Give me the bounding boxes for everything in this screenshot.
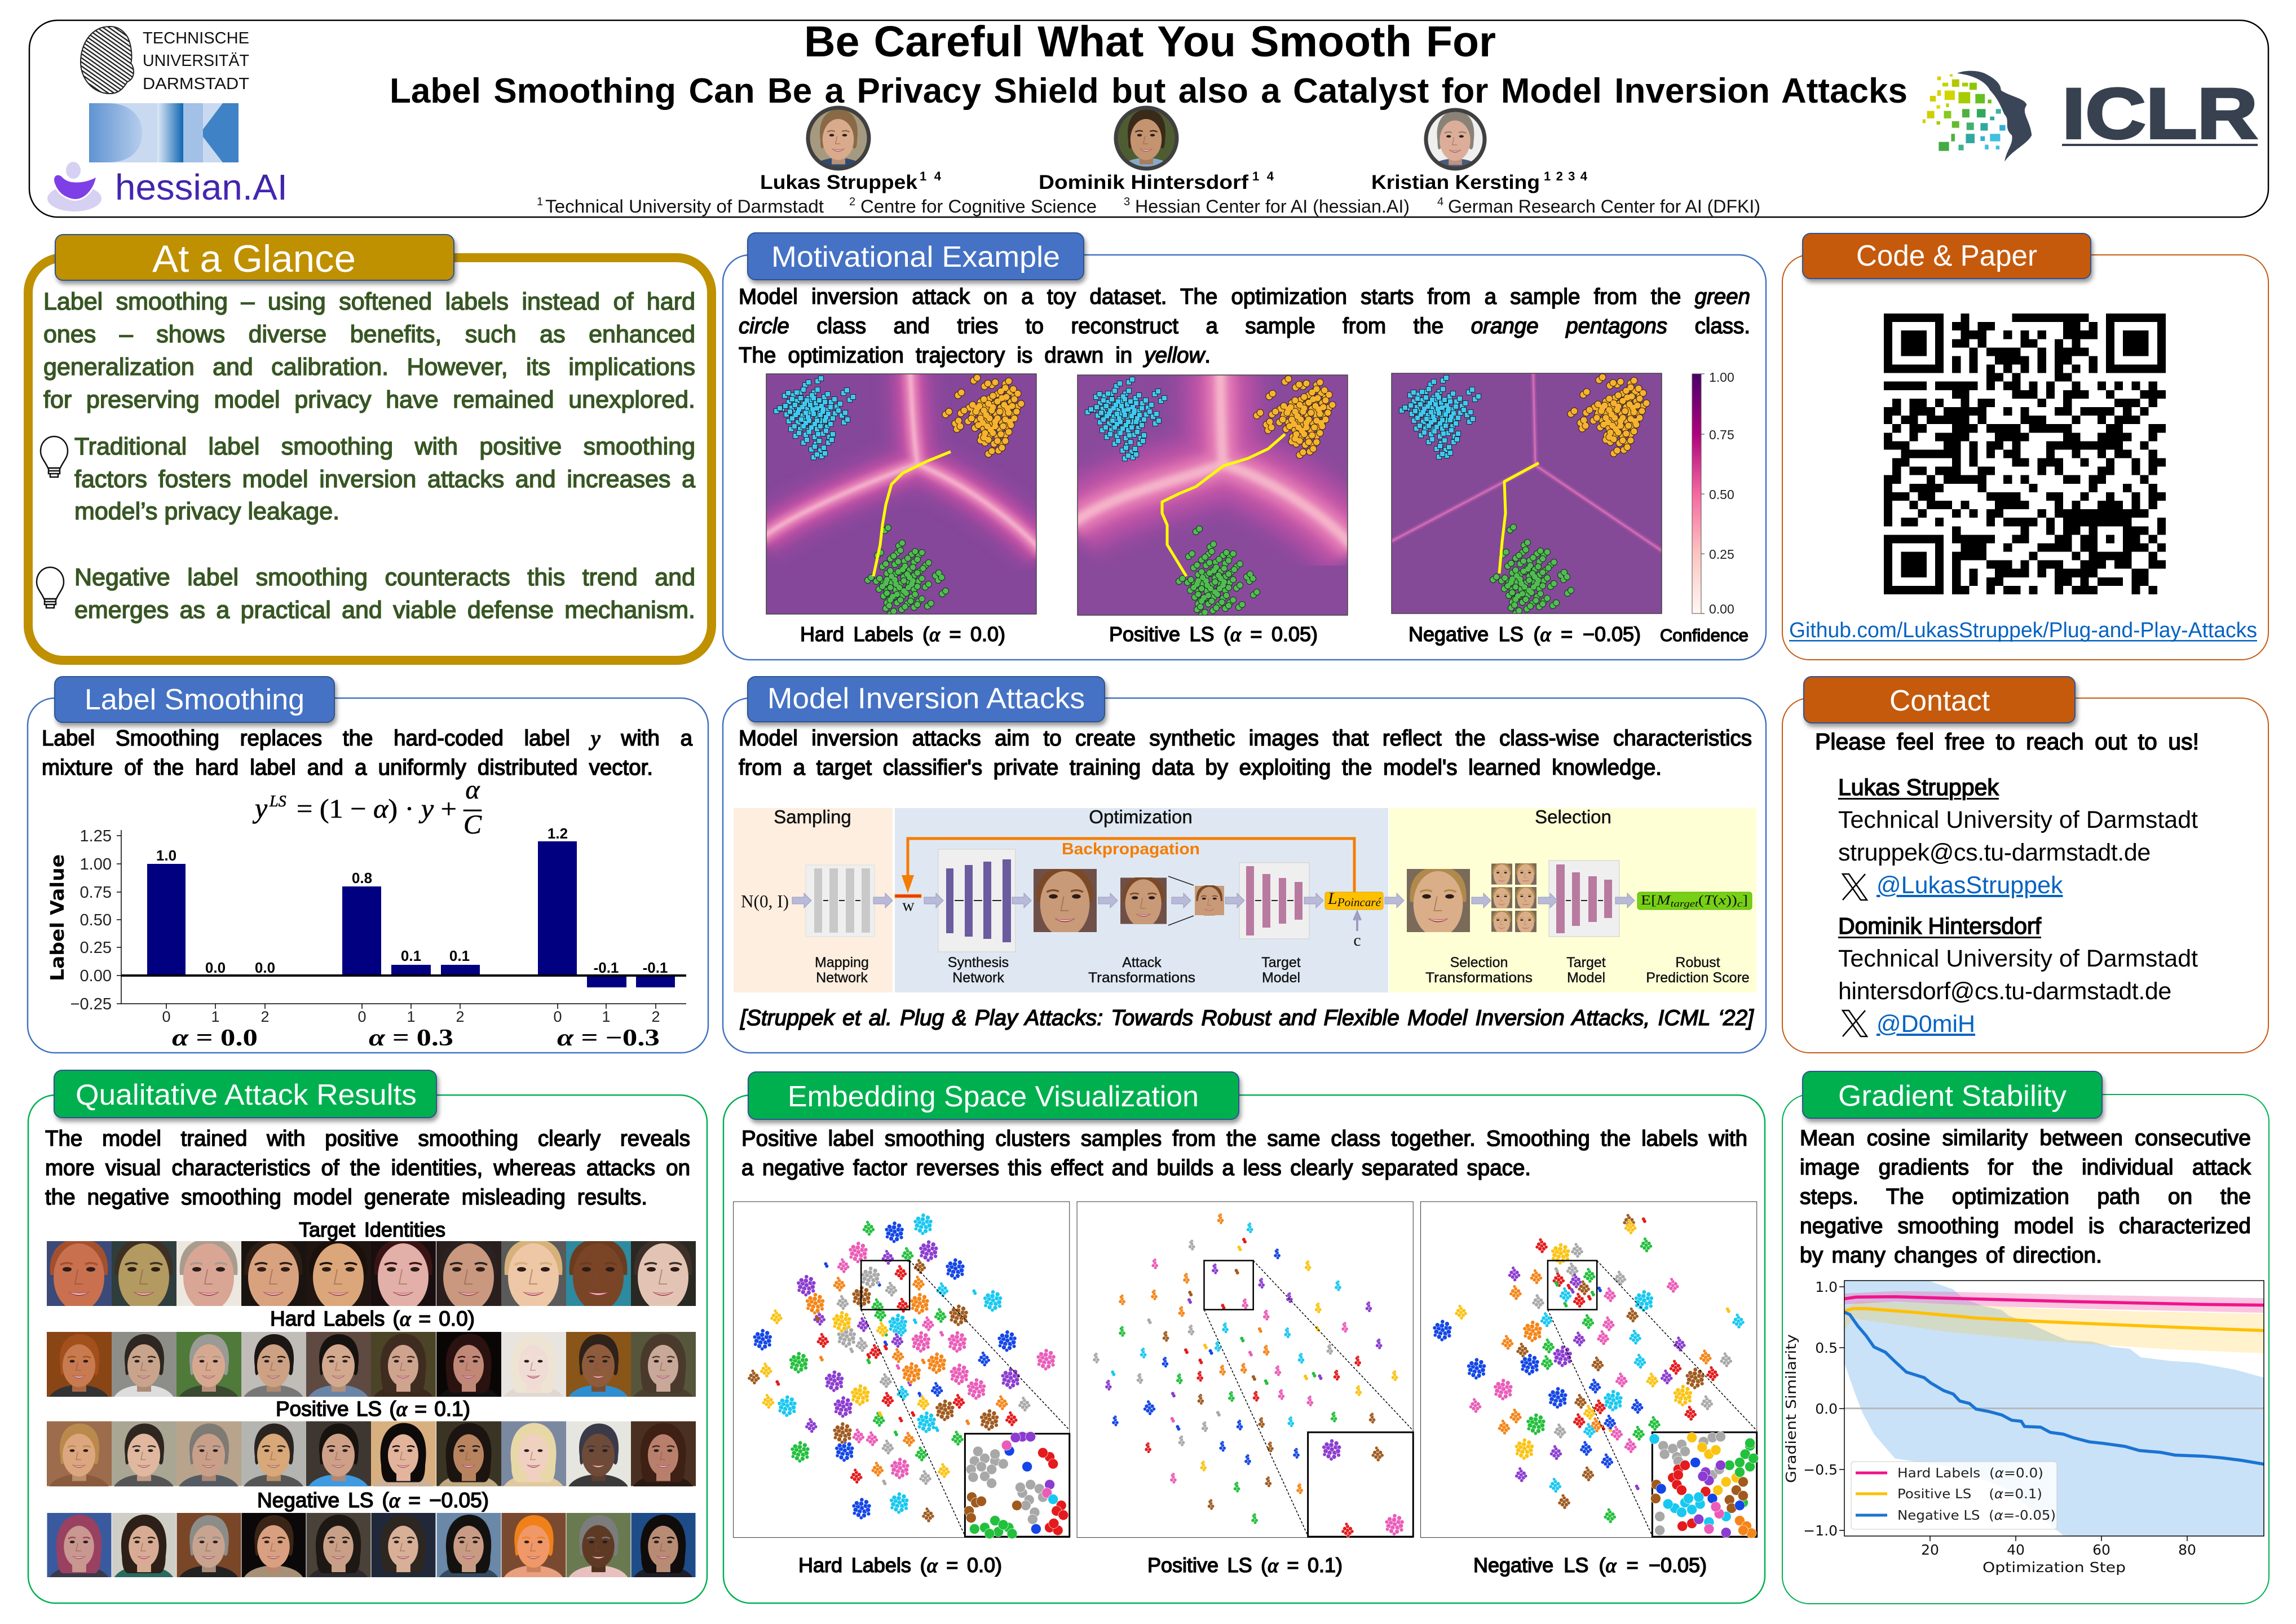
labels: math: E[M	[1641, 893, 1668, 908]
text block: qualitative description: the negative smoothing model generate misleading results.	[45, 1185, 647, 1210]
line chart: gradient similarity: 60	[2092, 1542, 2110, 1558]
text block: label smoothing intro	[43, 288, 695, 413]
text: Lukas Struppek contact	[1838, 771, 2207, 902]
labels: math	[741, 889, 1752, 950]
logo: TU Darmstadt: UNIVERSITÄT	[143, 52, 249, 70]
line chart: gradient similarity: 0.0	[1815, 1401, 1838, 1417]
labels: math: T(x))	[1704, 893, 1735, 908]
panel: Label Smoothing	[28, 676, 708, 1053]
author names	[760, 169, 1588, 193]
author names: Kristian Kersting	[1371, 171, 1540, 193]
line chart: gradient similarity: 1.0	[1815, 1279, 1838, 1295]
labels: pipeline stages: Robust	[1675, 955, 1720, 970]
bar chart: label values: 0.1	[449, 947, 470, 964]
caption: negative LS: Negative LS (α = −0.05)	[257, 1489, 489, 1512]
scatter plot: positive LS	[1077, 1202, 1413, 1538]
colorbar: confidence: 0.50	[1709, 487, 1734, 502]
labels: pipeline stages: Synthesis	[948, 955, 1009, 970]
bar chart: label values: 0.00	[80, 967, 112, 985]
formula: α	[465, 775, 480, 805]
heading: Contact: Contact	[1889, 685, 1990, 717]
scatter plot: negative LS	[1421, 1202, 1759, 1538]
text block: model inversion description: Model inversion attacks aim to create synthetic images that reflect the class-wise characteristics	[739, 726, 1752, 751]
bar chart: label values: α = 0.0	[172, 1025, 258, 1051]
panel: Qualitative Attack Results	[28, 1070, 707, 1603]
caption: hard labels plot: Hard Labels (α = 0.0)	[800, 623, 1005, 646]
heading: Motivational Example	[748, 233, 1084, 280]
logo: ICLR brain	[1923, 71, 2032, 162]
labels: math: c	[1353, 931, 1361, 950]
formula: = (1 − α) · y +	[297, 794, 457, 824]
heading: At a Glance	[55, 235, 454, 280]
heading: Code & Paper: Code & Paper	[1856, 240, 2037, 272]
legend	[1851, 1462, 2057, 1529]
text block: label smoothing intro: Label smoothing – using softened labels instead of hard	[43, 288, 695, 315]
heading: Gradient Stability: Gradient Stability	[1838, 1080, 2067, 1113]
bar chart: label values: -0.1	[594, 959, 619, 976]
backpropagation arrow	[902, 839, 1354, 893]
target model selection	[1549, 860, 1619, 937]
section: sampling: Sampling	[774, 806, 851, 827]
text block: finding 2: emerges as a practical and viable defense mechanism.	[74, 597, 695, 624]
bar chart: label values: 1.00	[80, 855, 112, 873]
text block: qualitative description	[45, 1124, 690, 1212]
panel: Embedding Space Visualization	[723, 1072, 1765, 1603]
face row: hard labels	[47, 1332, 696, 1419]
labels: pipeline stages: Network	[952, 970, 1004, 986]
bar chart: label values: 0.0	[205, 959, 226, 976]
bar chart: label values: 0.8	[352, 870, 372, 886]
panel: Gradient Stability	[1782, 1071, 2269, 1604]
bar chart: label values: −0.25	[70, 995, 112, 1013]
face images	[1034, 863, 1536, 937]
line chart: gradient similarity	[1783, 1279, 2264, 1576]
avatar: Dominik Hintersdorf	[1115, 107, 1177, 190]
panel: Motivational Example	[723, 233, 1766, 660]
labels: math: ]	[1742, 893, 1748, 908]
bar chart: label values: 0	[553, 1008, 562, 1025]
bar chart: label values: Label Value	[46, 854, 68, 981]
labels: pipeline stages: Transformations	[1425, 970, 1533, 986]
panel: At a Glance	[24, 234, 716, 665]
heading: Gradient Stability	[1803, 1071, 2102, 1118]
bar chart: label values	[46, 825, 686, 1051]
text block: finding 1: Traditional label smoothing with positive smoothing	[74, 433, 695, 460]
logo: DFKI	[89, 103, 239, 162]
heading: Qualitative Attack Results	[54, 1070, 436, 1118]
line chart: gradient similarity: 0.5	[1815, 1340, 1838, 1356]
heading: Contact	[1804, 677, 2075, 723]
text block: finding 1: model’s privacy leakage.	[74, 498, 339, 525]
logo: TU Darmstadt: DARMSTADT	[143, 75, 249, 93]
affiliations: Hessian Center for AI (hessian.AI)	[1135, 196, 1410, 217]
text block: motivational description: The optimization trajectory is drawn in yellow.	[739, 343, 1211, 368]
text: Dominik Hintersdorf contact: Dominik Hintersdorf	[1838, 913, 2041, 939]
text block: gradient description: negative smoothing model is characterized	[1800, 1214, 2251, 1238]
affiliations: 3	[1124, 196, 1130, 208]
text block: embedding description: Positive label smoothing clusters samples from the same class together. Smoothing the labels with	[741, 1127, 1747, 1151]
text: Lukas Struppek contact: Technical University of Darmstadt	[1838, 806, 2198, 833]
text block: finding 2: Negative label smoothing counteracts this trend and	[74, 564, 695, 591]
labels: pipeline stages: Selection	[1450, 955, 1508, 970]
panel: Contact	[1782, 677, 2269, 1053]
bar chart: label values: 0	[357, 1008, 367, 1025]
formula: C	[463, 810, 482, 840]
author names: 1 4	[1252, 169, 1274, 183]
text block: label smoothing intro: ones – shows diverse benefits, such as enhanced	[43, 321, 695, 348]
legend: Positive LS ( α=0.1)	[1897, 1487, 2042, 1502]
heading: Code & Paper	[1803, 233, 2091, 279]
colorbar: confidence	[1692, 370, 1734, 616]
synthesis network	[938, 849, 1015, 952]
labels: pipeline stages: Model	[1262, 970, 1300, 986]
text block: gradient description	[1800, 1124, 2251, 1270]
labels: pipeline stages: Network	[816, 970, 868, 986]
labels: math: w	[902, 896, 915, 915]
text: Lukas Struppek contact: struppek@cs.tu-darmstadt.de	[1838, 839, 2151, 866]
avatar: Lukas Struppek	[807, 107, 869, 190]
text: Dominik Hintersdorf contact: Technical University of Darmstadt	[1838, 945, 2198, 972]
line chart: gradient similarity: Optimization Step	[1982, 1559, 2126, 1576]
bar chart: label values: 0.75	[80, 884, 112, 902]
line chart: gradient similarity: Gradient Similarity	[1783, 1334, 1799, 1483]
text block: motivational description	[739, 283, 1750, 370]
bar chart: label values: 0.50	[80, 911, 112, 929]
heading: Motivational Example: Motivational Example	[771, 241, 1060, 273]
logo: TU Darmstadt: TECHNISCHE	[143, 29, 249, 47]
bar chart: label values: 1	[211, 1008, 220, 1025]
line chart: gradient similarity: 20	[1921, 1542, 1939, 1558]
labels: math: L	[1327, 889, 1337, 908]
text block: motivational description: circle class and tries to reconstruct a sample from the orange pentagons class.	[739, 314, 1750, 338]
affiliations: Technical University of Darmstadt	[545, 196, 824, 217]
caption: negative LS embedding: Negative LS (α = −0.05)	[1473, 1554, 1707, 1577]
labels: pipeline stages: Model	[1567, 970, 1605, 986]
icon: light bulb	[41, 436, 68, 477]
colorbar: confidence: 0.00	[1709, 602, 1734, 616]
bar chart: label values: 2	[456, 1008, 465, 1025]
text block: model inversion description: from a target classifier's private training data by exploiting the model's learned knowledge.	[739, 756, 1662, 780]
line chart: gradient similarity: −1.0	[1803, 1522, 1838, 1539]
labels: pipeline stages: Attack	[1122, 955, 1162, 970]
section: selection: Selection	[1535, 806, 1611, 827]
bar chart: label values: 2	[260, 1008, 270, 1025]
plot: positive LS decision surface	[1072, 369, 1354, 615]
bar chart: label values: 1	[407, 1008, 416, 1025]
text: Lukas Struppek contact: Lukas Struppek	[1838, 774, 1999, 800]
caption: positive LS plot: Positive LS (α = 0.05)	[1109, 623, 1318, 646]
labels: math: N(0, I)	[741, 891, 789, 911]
text block: motivational description: Model inversion attack on a toy dataset. The optimization starts from a sample from the green	[739, 285, 1750, 309]
text block: embedding description: a negative factor reverses this effect and builds a less clearly separated space.	[741, 1156, 1531, 1180]
author names: 1 2 3 4	[1544, 169, 1588, 183]
author names: 1 4	[920, 169, 942, 183]
flow arrows	[792, 893, 1635, 931]
formula	[252, 775, 482, 840]
text block: gradient description: Mean cosine similarity between consecutive	[1800, 1126, 2251, 1150]
section: sampling	[734, 806, 893, 992]
labels: math: (	[1698, 893, 1704, 908]
bar chart: label values: 1.2	[547, 825, 568, 842]
caption: positive LS embedding: Positive LS (α = 0.1)	[1147, 1554, 1343, 1577]
icon: X logo	[1843, 874, 1867, 900]
text: Dominik Hintersdorf contact	[1838, 910, 2207, 1040]
title: Be Careful What You Smooth For	[804, 17, 1496, 66]
icon: light bulb	[37, 567, 64, 608]
text block: label smoothing intro: generalization and calibration. However, its implications	[43, 354, 695, 381]
text block: gradient description: steps. The optimization path on the	[1800, 1185, 2251, 1209]
labels: pipeline stages: Prediction Score	[1646, 970, 1750, 986]
line chart: gradient similarity: 80	[2178, 1542, 2196, 1558]
labels: pipeline stages: Target	[1566, 955, 1606, 970]
bar chart: label values: 0.0	[255, 959, 275, 976]
section: optimization: Optimization	[1089, 806, 1193, 827]
caption: confidence: Confidence	[1660, 625, 1749, 645]
labels: pipeline stages: Target	[1261, 955, 1301, 970]
mapping network	[806, 865, 875, 937]
heading: Model Inversion Attacks	[748, 677, 1105, 722]
colorbar: confidence: 1.00	[1709, 370, 1734, 385]
face row: target identities	[47, 1239, 696, 1311]
text block: gradient description: image gradients for the individual attack	[1800, 1155, 2251, 1180]
text: Dominik Hintersdorf contact: hintersdorf@cs.tu-darmstadt.de	[1838, 978, 2171, 1005]
heading: Embedding Space Visualization: Embedding Space Visualization	[788, 1080, 1199, 1113]
affiliations: Centre for Cognitive Science	[860, 196, 1097, 217]
legend: Negative LS ( α=-0.05)	[1897, 1508, 2056, 1523]
heading: Embedding Space Visualization	[748, 1072, 1239, 1119]
heading: Model Inversion Attacks: Model Inversion Attacks	[767, 682, 1085, 715]
bar chart: label values: α = −0.3	[557, 1025, 660, 1051]
text block: gradient description: by many changes of direction.	[1800, 1243, 2102, 1268]
labels: math: c	[1737, 898, 1743, 909]
logo: TU Darmstadt	[81, 27, 249, 94]
text block: finding 2	[74, 561, 695, 626]
text block: qualitative description: more visual characteristics of the identities, whereas attacks on	[45, 1156, 690, 1180]
subtitle: Label Smoothing Can Be a Privacy Shield but also a Catalyst for Model Inversion Attacks	[390, 72, 1908, 111]
colorbar: confidence: 0.75	[1709, 427, 1734, 442]
text block: label smoothing description: mixture of the hard label and a uniformly distributed vector.	[42, 756, 653, 780]
bar chart: label values: α = 0.3	[369, 1025, 453, 1051]
line chart: gradient similarity: −0.5	[1803, 1462, 1838, 1478]
heading: At a Glance: At a Glance	[152, 237, 356, 280]
caption: target identities: Target Identities	[299, 1218, 445, 1241]
colorbar: confidence: 0.25	[1709, 547, 1734, 562]
face row: negative LS	[47, 1513, 696, 1599]
affiliations	[537, 196, 1760, 217]
author names: Dominik Hintersdorf	[1039, 171, 1248, 193]
bar chart: label values: 1	[602, 1008, 611, 1025]
panel: header	[28, 17, 2269, 218]
bar chart: label values: 1.0	[156, 847, 176, 864]
legend: Hard Labels ( α=0.0)	[1897, 1466, 2043, 1481]
labels: math: target	[1671, 898, 1699, 909]
formula: LS	[269, 793, 286, 810]
link: GitHub repository: Github.com/LukasStruppek/Plug-and-Play-Attacks	[1789, 619, 2257, 642]
affiliations: 1	[537, 196, 543, 208]
labels: pipeline stages: Transformations	[1088, 970, 1195, 986]
text block: label smoothing description	[42, 724, 692, 783]
text block: finding 1: factors fosters model inversion attacks and increases a	[74, 466, 695, 493]
text block: qualitative description: The model trained with positive smoothing clearly reveals	[45, 1127, 690, 1151]
labels: pipeline stages	[815, 955, 1750, 986]
plot: hard labels decision surface	[761, 368, 1043, 614]
QR code	[1884, 314, 2166, 594]
citation: [Struppek et al. Plug & Play Attacks: Towards Robust and Flexible Model Inversion Attacks, ICML ‘22]	[740, 1006, 1754, 1030]
text block: label smoothing description: Label Smoothing replaces the hard-coded label y with a	[42, 726, 692, 751]
bar chart: label values: -0.1	[643, 959, 668, 976]
text: Dominik Hintersdorf contact: @D0miH	[1876, 1010, 1975, 1038]
heading: Label Smoothing	[55, 677, 334, 722]
plot: negative LS decision surface	[1386, 368, 1668, 614]
logo: hessian.AI: hessian.AI	[115, 167, 288, 208]
text block: label smoothing intro: for preserving model privacy have remained unexplored.	[43, 386, 695, 413]
logo: ICLR wordmark: ICLR	[2062, 73, 2258, 153]
formula: y	[252, 792, 268, 824]
panel: Code & Paper	[1782, 233, 2269, 660]
author names: Lukas Struppek	[760, 171, 918, 193]
affiliations: 2	[849, 196, 855, 208]
affiliations: 4	[1437, 196, 1443, 208]
scatter plot: hard labels	[734, 1202, 1070, 1539]
face row: positive LS	[47, 1421, 696, 1508]
labels: math: Poincaré	[1337, 895, 1382, 909]
section: selection	[1389, 806, 1756, 992]
diagram: plug and play attack pipeline	[734, 806, 1756, 992]
heading: Qualitative Attack Results: Qualitative Attack Results	[76, 1079, 417, 1111]
caption: hard labels embedding: Hard Labels (α = 0.0)	[798, 1554, 1002, 1577]
target model	[1239, 863, 1309, 939]
text block: finding 1	[74, 433, 696, 525]
section: optimization	[895, 806, 1388, 992]
bar chart: label values: 0.1	[401, 947, 421, 964]
panel: Model Inversion Attacks	[723, 676, 1766, 1053]
bar chart: label values: 1.25	[80, 827, 112, 845]
text: invitation: Please feel free to reach out to us!	[1815, 729, 2199, 754]
text: Lukas Struppek contact: @LukasStruppek	[1876, 872, 2063, 899]
caption: positive LS: Positive LS (α = 0.1)	[276, 1397, 470, 1421]
caption: negative LS plot: Negative LS (α = −0.05)	[1408, 623, 1641, 646]
affiliations: German Research Center for AI (DFKI)	[1448, 196, 1760, 217]
labels: pipeline stages: Mapping	[815, 955, 869, 970]
bar chart: label values: 0	[162, 1008, 171, 1025]
text block: model inversion description	[739, 724, 1752, 783]
bar chart: label values: 0.25	[80, 939, 112, 957]
avatar: Kristian Kersting	[1425, 109, 1486, 191]
text block: embedding description	[741, 1124, 1747, 1183]
backpropagation arrow: Backpropagation	[1062, 840, 1200, 858]
heading: Label Smoothing: Label Smoothing	[85, 683, 304, 716]
logo: hessian.AI	[47, 162, 288, 211]
icon: X logo	[1843, 1010, 1867, 1036]
bar chart: label values: 2	[651, 1008, 660, 1025]
line chart: gradient similarity: 40	[2007, 1542, 2025, 1558]
caption: hard labels: Hard Labels (α = 0.0)	[270, 1307, 475, 1331]
